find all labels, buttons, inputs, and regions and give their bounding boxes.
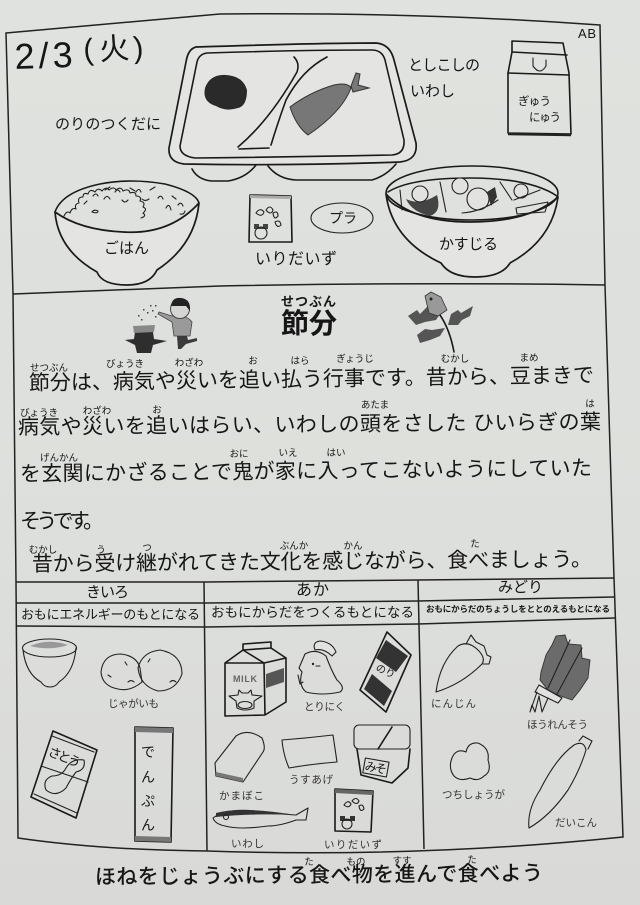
- label: nori tsukudani: のりのつくだに: [55, 116, 161, 133]
- heading: yellow: きいろ: [86, 584, 129, 601]
- date heading: 2/3: [14, 34, 73, 77]
- slogan: ほねをじょうぶにする食べ物を進んで食べよう: [95, 862, 543, 889]
- label: daikon: だいこん: [555, 817, 597, 829]
- slogan: すす: [392, 856, 412, 867]
- date heading: [14, 31, 144, 77]
- icon: small rice bowl: [22, 639, 76, 687]
- icon: nori pack: [360, 632, 411, 712]
- icon: milk carton: MILK: [233, 674, 258, 684]
- icon: kasujiru soup bowl: [386, 166, 558, 277]
- label: sardine: いわし: [231, 838, 264, 850]
- date heading: 火: [98, 32, 130, 67]
- body text line 1: ぎょうじ: [336, 353, 374, 365]
- body text line 3: いえ: [278, 448, 298, 459]
- icon: milk carton: [225, 642, 286, 716]
- body text line 2: は: [585, 399, 595, 410]
- icon: grilled sardine: [290, 73, 369, 135]
- description: body condition: おもにからだのちょうしをととのえるもとになる: [426, 604, 610, 614]
- body text line 5: た: [470, 539, 480, 550]
- label: plastic mark: [311, 203, 373, 233]
- icon: potatoes: [101, 650, 182, 691]
- date heading: (: [82, 33, 94, 67]
- slogan: た: [304, 857, 314, 868]
- label: toshikoshi no iwashi: [408, 57, 480, 100]
- description: energy: おもにエネルギーのもとになる: [21, 607, 200, 622]
- icon: milk carton: ぎゅう: [518, 94, 551, 108]
- icon: starch packet: ん: [141, 817, 155, 833]
- body text line 1: むかし: [441, 354, 469, 365]
- label: chicken: とりにく: [304, 701, 345, 713]
- icon: starch packet: [135, 727, 173, 842]
- icon: carrot: [436, 635, 491, 692]
- body text line 5: むかし: [29, 545, 57, 556]
- body text line 3: げんかん: [40, 453, 78, 464]
- panel: green food group: [426, 579, 610, 829]
- body text line 1: お: [248, 356, 258, 367]
- icon: holly and sardine head: [408, 292, 473, 352]
- label: spinach: ほうれんそう: [527, 719, 588, 731]
- body text line 2: あたま: [361, 400, 389, 411]
- body text line 1: はら: [290, 356, 310, 367]
- slogan: た: [467, 855, 477, 866]
- heading: setsubun: せつぶん: [281, 294, 336, 309]
- body text line 5: かん: [343, 541, 363, 552]
- heading: setsubun: [281, 294, 337, 339]
- size code AB: AB: [578, 26, 596, 41]
- icon: nori tsukudani: [204, 75, 247, 110]
- body text line 5: う: [96, 545, 106, 556]
- body text line 1: びょうき: [106, 359, 144, 370]
- heading: green: みどり: [498, 579, 543, 596]
- icon: sugar bag: さとう: [46, 744, 83, 771]
- label: ginger: つちしょうが: [442, 788, 506, 801]
- body text line 2: びょうき: [20, 408, 58, 419]
- body text line 1: まめ: [519, 353, 539, 364]
- icon: ginger: [450, 743, 489, 780]
- label: plastic mark: プラ: [329, 210, 357, 226]
- label: toshikoshi no iwashi: としこしの: [408, 57, 480, 74]
- icon: kasujiru soup bowl: かすじる: [439, 236, 498, 253]
- icon: miso tub: みそ: [364, 759, 388, 777]
- slogan: もの: [346, 857, 366, 868]
- heading: red: あか: [296, 581, 329, 599]
- icon: sardine: [213, 808, 308, 828]
- icon: iridaizu packet: [249, 195, 292, 242]
- label: usuage: うすあげ: [289, 774, 334, 786]
- description: body building: おもにからだをつくるもとになる: [211, 605, 414, 620]
- body text line 1: わざわ: [175, 357, 203, 369]
- icon: usuage fried tofu: [282, 735, 337, 768]
- icon: boy throwing beans at oni: [125, 298, 197, 353]
- icon: miso tub: [354, 725, 410, 783]
- label: iridaizu: いりだいず: [255, 250, 337, 268]
- icon: chicken: [298, 641, 342, 694]
- label: iridaizu: いりだいず: [324, 839, 382, 851]
- body text line 5: つ: [142, 543, 152, 554]
- body text line 4: そうです。: [20, 510, 104, 533]
- icon: nori pack: のり: [374, 662, 397, 681]
- body text line 5: ぶんか: [280, 541, 309, 552]
- body text line 1: せつぶん: [30, 363, 68, 374]
- date heading: ): [132, 31, 144, 65]
- icon: rice bowl: ごはん: [104, 240, 149, 257]
- icon: daikon: [529, 736, 592, 828]
- icon: iridaizu packet: [335, 789, 373, 832]
- icon: milk carton: [508, 41, 571, 135]
- body text line 1: 節分は、病気や災いを追い払う行事です。昔から、豆まきで: [29, 364, 594, 395]
- body text line 2: 病気や災いを追いはらい、いわしの頭をさした ひいらぎの葉: [18, 411, 601, 439]
- heading: setsubun: 節分: [281, 308, 337, 339]
- body text line 3: はい: [326, 448, 346, 459]
- label: potato: じゃがいも: [108, 697, 159, 710]
- icon: starch packet: ぷ: [141, 793, 155, 809]
- panel: red food group: [211, 581, 414, 851]
- icon: bento tray: [169, 43, 416, 181]
- panel: yellow food group: [21, 584, 200, 842]
- body text line 5: 昔から受け継がれてきた文化を感じながら、食べましょう。: [32, 548, 592, 576]
- body text line 2: わざわ: [83, 405, 111, 417]
- label: kamaboko: かまぼこ: [219, 790, 264, 802]
- body text line 3: を玄関にかざることで鬼が家に入ってこないようにしていた: [20, 456, 592, 486]
- icon: starch packet: ん: [141, 769, 155, 785]
- label: carrot: にんじん: [431, 698, 476, 710]
- label: toshikoshi no iwashi: いわし: [410, 83, 455, 100]
- body text line 2: お: [152, 405, 162, 416]
- icon: sugar bag: [31, 731, 97, 818]
- panel: menu illustration: [55, 41, 571, 285]
- icon: spinach: [530, 635, 590, 712]
- body text line 3: おに: [229, 449, 249, 460]
- icon: milk carton: にゅう: [529, 111, 561, 124]
- icon: starch packet: で: [141, 744, 155, 760]
- panel: setsubun explanation: [18, 292, 601, 576]
- icon: kamaboko: [215, 732, 264, 782]
- icon: rice bowl: [55, 181, 199, 285]
